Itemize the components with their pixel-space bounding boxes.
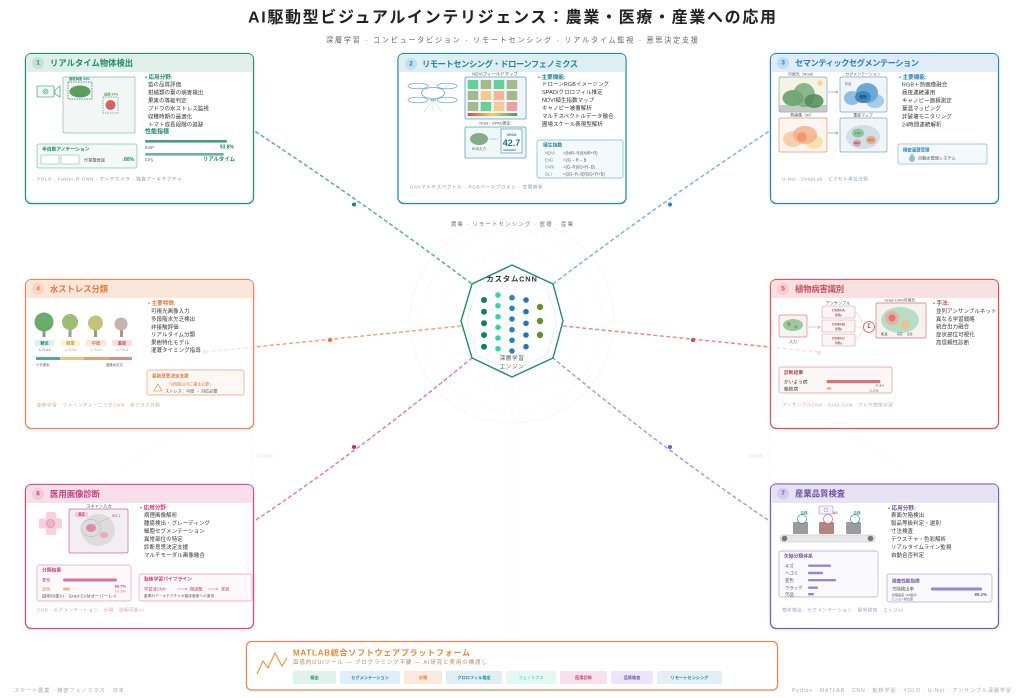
key features list	[148, 299, 201, 354]
performance metrics	[145, 128, 236, 163]
panel 3: semantic segmentation	[770, 54, 998, 204]
key features list: マルチスペクトルデータ融合	[542, 112, 614, 120]
number badge	[777, 488, 789, 500]
key features list: • 主要特徴:	[148, 299, 176, 307]
application list: ブドウの水ストレス監視	[148, 105, 209, 113]
application list: トマト成長段階の追跡	[148, 121, 204, 129]
stress map tile	[840, 112, 887, 152]
key features list: 灌漑タイミング指導	[151, 346, 201, 354]
number badge: 7	[781, 490, 785, 497]
key features list: 非接触評価	[151, 323, 179, 331]
panel 6: medical image diagnosis	[26, 484, 254, 628]
number badge	[32, 488, 44, 500]
number badge: 6	[36, 490, 40, 498]
RGB to SPAD estimation: 42.7	[503, 138, 520, 148]
key features list	[899, 73, 952, 129]
application list	[145, 73, 209, 129]
tech footer: UAVマルチスペクトル · RGBベースプロキシ · 空間解析	[410, 184, 543, 190]
application list: 表面欠陥検出	[891, 511, 924, 519]
NDVI field map	[465, 72, 526, 119]
application list: 寸法検査	[891, 527, 914, 535]
network layer 1	[481, 297, 487, 350]
connector: panel 6 to centre	[256, 358, 472, 520]
method list: 症状部位可視化	[936, 330, 975, 338]
faint link label right: 技術連携	[747, 452, 763, 458]
application list	[140, 504, 211, 559]
heading: セマンティックセグメンテーション	[795, 58, 920, 68]
number badge: 4	[36, 286, 40, 292]
Grad-CAM visualisation	[876, 296, 926, 338]
Grad-CAM visualisation: 注目	[907, 332, 913, 336]
key features list: 24時間連続解析	[902, 121, 942, 129]
heading: リモートセンシング・ドローンフェノミクス	[422, 59, 579, 69]
RGB image tile: 可視光（RGB）	[788, 72, 816, 76]
application list: テクスチャ・色彩解析	[891, 535, 947, 543]
application list: 柑橘類の葉の病害検出	[148, 89, 203, 97]
defect taxonomy box: 欠品	[785, 591, 794, 598]
fusion symbol: Σ	[867, 324, 871, 330]
classification result box: 分類結果	[42, 566, 61, 574]
inspection metrics box: 処理速度 >60個/分	[892, 592, 917, 597]
conveyor inspection illustration	[780, 506, 875, 542]
key features list: 圃場スケール表現型解析	[542, 120, 603, 128]
RGB to SPAD estimation	[465, 120, 526, 158]
application list: 製品等級判定・選別	[891, 519, 941, 527]
faint connector traces over panels	[202, 347, 822, 356]
inspection metrics box: ビジョン統合型	[892, 596, 913, 601]
decision support box: 「6時間以内に灌水必要」	[167, 380, 213, 386]
segmentation tile: 背景	[845, 81, 852, 86]
precision irrigation box: 精密灌漑管理	[903, 146, 930, 154]
defect taxonomy box: ヘコミ	[785, 570, 798, 576]
footer note right: Python · MATLAB · CNN · 転移学習 · YOLO · U-Net · アンサンブル深層学習	[792, 686, 1011, 694]
feature chips: リモートセンシング	[671, 674, 709, 681]
feature chips: フェノミクス	[518, 674, 544, 681]
subtitle: 深層学習 · コンピュータビジョン · リモートセンシング · リアルタイム監視 · 意思決定支援	[326, 36, 698, 44]
semi-automatic annotation box: ↓80%	[121, 157, 135, 163]
key features list: • 主要機能:	[899, 73, 927, 81]
network output layer	[537, 304, 543, 338]
network layer 3	[509, 295, 515, 354]
application list: • 応用分野:	[888, 504, 916, 512]
water scale bar: 十分灌水	[36, 362, 50, 367]
application list: 苗の品質評価	[148, 81, 182, 89]
transfer learning pipeline box: 実装	[221, 586, 230, 592]
key features list	[538, 73, 614, 128]
background rings and faint guides	[120, 204, 905, 640]
feature chips: セグメンテーション	[351, 674, 389, 681]
method list: 統合出力融合	[936, 322, 970, 330]
diagnosis result box	[779, 367, 892, 393]
engine caption 2: エンジン	[500, 364, 524, 370]
application list	[888, 504, 952, 559]
heading: 植物病害識別	[795, 284, 845, 294]
scan input image: スキャン入力	[86, 502, 112, 510]
arrow: thermal to map	[828, 132, 838, 134]
platform tagline: 直感的GUIツール — プログラミング不要 — AI研究と実用の橋渡し	[293, 658, 487, 666]
method list: 高信頼性診断	[936, 338, 970, 346]
inspection metrics box: 99.2%	[975, 592, 987, 597]
stress level labels: 軽度	[66, 340, 75, 346]
precision irrigation box	[898, 144, 987, 164]
number badge	[32, 57, 44, 69]
decision support box: ストレス：中度 → 対応必要	[165, 388, 218, 394]
diagnosis result box: 輪紋病	[784, 386, 798, 392]
detection image: 葉斑病害 94%	[69, 76, 90, 81]
engine caption: 深層学習	[500, 354, 524, 362]
tech footer: アンサンブルCNN · Grad-CAM · マルチ病態学習	[782, 402, 893, 408]
tree: severe	[114, 318, 128, 337]
network layer 4	[523, 297, 529, 350]
precision irrigation box: 自動水管理システム	[918, 154, 956, 162]
tech footer: CNN · セグメンテーション · 分類 · 説明可能AI	[37, 606, 144, 614]
key features list: 多段階水欠乏検出	[151, 315, 195, 323]
number badge	[777, 283, 789, 295]
application list: リアルタイムライン監視	[891, 543, 952, 551]
scan input image	[69, 502, 128, 553]
feature chips: 品質検査	[624, 674, 641, 681]
defect taxonomy box: 欠陥分類体系	[784, 552, 813, 560]
key features list: ドローンRGBイメージング	[542, 80, 610, 88]
scan input image: HCI-1	[112, 514, 120, 518]
performance metrics: 性能指標	[145, 128, 169, 136]
icon: signal zigzag	[257, 653, 287, 674]
defect taxonomy box: 変色	[785, 577, 794, 584]
stress level labels: 健全	[40, 340, 49, 346]
diagnosis result box: 97.8%	[875, 384, 884, 388]
performance metrics: 93.8%	[220, 144, 235, 150]
application list: マルチモーダル画像融合	[144, 551, 205, 559]
diagnosis result box: 診断結果	[784, 369, 803, 376]
ring caption: 農業 · リモートセンシング · 医療 · 産業	[451, 220, 574, 228]
vegetation indices box: =2G − R − B	[563, 158, 587, 162]
panel: MATLAB software platform	[246, 642, 778, 690]
key features list: キャノピー被覆解析	[542, 104, 592, 112]
number badge	[777, 57, 789, 69]
application list: 自動合否判定	[891, 551, 925, 559]
application list: 果実の等級判定	[148, 97, 187, 105]
inspection metrics box	[887, 574, 992, 602]
stress level labels: レベル2	[90, 348, 102, 352]
tree: moderate	[88, 316, 103, 337]
transfer learning pipeline box: 学習済CNN	[144, 586, 166, 592]
platform name: MATLAB統合ソフトウェアプラットフォーム	[293, 648, 470, 658]
key features list: 非破壊モニタリング	[902, 113, 952, 121]
diagnosis result box: 2.2%	[870, 389, 879, 393]
method list: • 手法:	[933, 299, 950, 307]
key features list: リアルタイム分類	[151, 330, 196, 338]
detection image	[63, 76, 135, 133]
vegetation indices box: NDVI	[545, 150, 555, 156]
classification result box: 悪性	[42, 576, 50, 584]
inspection metrics box: 欠陥検出率	[892, 586, 915, 592]
number badge: 5	[781, 286, 785, 292]
ensemble CNN stack: 戦略β	[835, 327, 842, 331]
RGB to SPAD estimation: RGB入力	[472, 146, 487, 151]
classification result box	[37, 565, 131, 601]
transfer learning pipeline box: 農業AIアーキテクチャの臨床画像への適用	[144, 593, 214, 598]
input leaf image	[779, 315, 807, 344]
tech footer: YOLO · Faster R-CNN · マルチカメラ · 独自アーキテクチャ	[37, 176, 182, 182]
number badge: 2	[409, 60, 413, 68]
key features list: RGB＋熱画像融合	[902, 81, 948, 89]
heading: 医用画像診断	[50, 489, 101, 499]
key features list: SPAD/クロロフィル推定	[542, 88, 603, 96]
vegetation indices box: =(2G−R−B)/(2G+R+B)	[563, 172, 605, 176]
stress map tile: LFC	[855, 131, 862, 135]
key features list: 果樹特化モデル	[151, 338, 190, 346]
ensemble CNN stack	[822, 300, 855, 346]
application list: • 応用分野:	[140, 504, 168, 512]
connector: panel 1 to centre	[250, 128, 472, 284]
feature chips: 医用診断	[575, 674, 593, 681]
water scale bar: 重度水欠乏	[106, 362, 124, 367]
tree: mild	[62, 314, 78, 337]
footer note left: スマート農業 · 精密フェノミクス · 日本	[14, 686, 125, 694]
water scale bar	[36, 357, 132, 367]
application list: 異常部位の特定	[144, 535, 183, 543]
number badge	[32, 283, 44, 295]
network layer 2	[495, 292, 501, 352]
Grad-CAM visualisation: 低 高	[881, 332, 888, 336]
key features list: 昼夜連続運用	[902, 89, 935, 97]
vegetation indices box: GLI	[545, 172, 552, 176]
panel 1: real-time object detection	[26, 54, 254, 204]
performance metrics: mAP	[145, 145, 154, 150]
vegetation indices box: =(NIR−R)/(NIR+R)	[563, 150, 598, 156]
detection image: 成熟 97%	[104, 92, 118, 96]
ensemble CNN stack: CNN-B	[832, 322, 845, 326]
classification result box: 説明可能AI · Grad-CAMオーバーレイ	[42, 592, 117, 600]
transfer learning pipeline box	[139, 574, 252, 601]
segmentation tile: セグメンテーション	[846, 72, 881, 76]
vegetation indices box	[537, 140, 623, 178]
vegetation indices box: ExG	[545, 158, 553, 162]
stress level labels: レベル3	[116, 348, 128, 352]
method list: 並列アンサンブルネット	[936, 307, 997, 315]
connector: panel 4 to centre	[205, 326, 461, 352]
feature chips: 分類	[419, 674, 428, 681]
title: AI駆動型ビジュアルインテリジェンス：農業・医療・産業への応用	[248, 8, 776, 26]
segmentation tile	[840, 72, 887, 112]
Grad-CAM visualisation: Grad-CAM可視化	[884, 296, 916, 302]
key features list: 葉温マッピング	[902, 105, 941, 113]
stress map tile: SFS	[868, 138, 874, 142]
tech footer: 物体検出 · セグメンテーション · 異常検知 · エッジAI	[782, 606, 903, 614]
tech footer: 転移学習 · ファインチューニングCNN · 多クラス分類	[37, 402, 160, 408]
application list: 腫瘍検出・グレーディング	[144, 519, 211, 527]
performance metrics: リアルタイム	[203, 155, 236, 163]
connector: panel 5 to centre	[563, 326, 819, 352]
vegetation indices box: 植生指数	[543, 142, 562, 148]
Grad-CAM visualisation: 病変	[897, 332, 903, 336]
classification result box: 良性	[42, 586, 50, 592]
ensemble CNN stack: CNN-C	[832, 336, 845, 340]
feature chips: クロロフィル推定	[457, 674, 492, 681]
key features list: NDVI植生指数マップ	[542, 96, 595, 104]
ensemble CNN stack: 戦略γ	[835, 341, 843, 345]
arrow: input to ensemble	[808, 326, 820, 328]
ensemble CNN stack: アンサンブル	[826, 300, 850, 306]
semi-automatic annotation box: 作業量軽減	[84, 156, 106, 164]
stress map tile: REX	[854, 141, 860, 145]
ensemble CNN stack: 戦略α	[835, 313, 842, 317]
classification result box: 10.3%	[115, 588, 126, 594]
thermal image tile	[779, 112, 827, 152]
diagnosis result box: かいよう病	[784, 378, 808, 386]
number badge	[405, 58, 417, 70]
conveyor inspection illustration: NG	[833, 511, 838, 515]
segmentation tile: 植物	[859, 94, 867, 99]
stress level labels: 重度	[118, 340, 127, 346]
tech footer: U-Net · DeepLab · ピクセル単位分類	[782, 176, 868, 182]
heading: リアルタイム物体検出	[50, 58, 134, 68]
classification result box: 89.7%	[115, 584, 126, 588]
RGB to SPAD estimation: SPAD	[506, 133, 517, 137]
number badge: 1	[36, 60, 40, 66]
heading: 水ストレス分類	[50, 284, 109, 294]
icon: drone	[408, 83, 457, 112]
defect taxonomy box: クラック	[785, 586, 803, 592]
icon: camera	[37, 86, 60, 97]
thermal image tile: 熱画像（IR）	[790, 112, 814, 118]
RGB to SPAD estimation: RGB→SPAD推定	[479, 120, 511, 126]
defect taxonomy box: キズ	[785, 562, 794, 570]
central CNN engine	[461, 265, 563, 377]
input leaf image: 入力	[789, 339, 797, 344]
application list: • 応用分野:	[145, 73, 173, 81]
panel 2: remote sensing and drone phenomics	[398, 54, 626, 204]
arrow: RGB to segmentation	[828, 90, 838, 94]
feature chips	[293, 671, 722, 684]
icon: medical cross	[39, 512, 62, 535]
key features list: • 主要機能:	[538, 73, 566, 81]
stress level labels: 中度	[92, 340, 101, 346]
semi-automatic annotation box: 半自動アノテーション	[42, 146, 90, 152]
connector: panel 3 to centre	[553, 128, 774, 284]
conveyor inspection illustration: 合格	[800, 510, 808, 515]
stress level labels: レベル1	[64, 348, 77, 352]
performance metrics: FPS	[145, 158, 153, 162]
stress level labels: レベル0	[38, 348, 51, 352]
RGB image tile	[779, 72, 827, 112]
key features list: キャノピー面積測定	[902, 97, 952, 105]
transfer learning pipeline box: 転移学習パイプライン	[144, 576, 192, 582]
scan input image: 異常	[78, 512, 85, 516]
NDVI field map: NDVIフィールドマップ	[472, 72, 518, 78]
vegetation indices box: =(G−R)/(G+R−B)	[563, 164, 595, 170]
vegetation indices box: VARI	[545, 164, 554, 170]
stress level labels	[35, 340, 132, 352]
key features list: 可視光画像入力	[151, 307, 190, 315]
conveyor inspection illustration: 合格	[853, 510, 861, 515]
application list: 病理画像解析	[144, 511, 178, 519]
faint link label left: 技術連携	[257, 452, 273, 458]
application list: 収穫時期の最適化	[148, 113, 193, 121]
application list: 診断意思決定支援	[144, 543, 189, 551]
decision support box: 最新意思決定支援	[152, 372, 189, 380]
method list: 異なる学習戦略	[936, 315, 975, 323]
number badge: 3	[781, 60, 785, 66]
engine name: カスタムCNN	[486, 274, 538, 284]
defect taxonomy box	[779, 551, 878, 598]
stress map tile: 重度マップ	[853, 112, 873, 118]
ensemble CNN stack: CNN-A	[832, 308, 845, 312]
feature chips: 検出	[310, 674, 319, 681]
panel 7: industrial quality inspection	[770, 484, 998, 628]
semi-automatic annotation box	[37, 144, 137, 168]
transfer learning pipeline box: 微調整	[190, 586, 203, 592]
fusion symbol	[856, 312, 874, 340]
method list	[933, 299, 997, 346]
connector: panel 7 to centre	[553, 358, 768, 520]
heading: 産業品質検査	[795, 488, 846, 498]
application list: 細胞セグメンテーション	[144, 527, 205, 535]
panel 4: water stress classification	[26, 280, 254, 428]
decision support box	[147, 370, 244, 395]
inspection metrics box: 検査性能指標	[892, 578, 920, 584]
panel 5: plant disease identification	[770, 280, 998, 428]
tree: healthy	[34, 312, 54, 337]
